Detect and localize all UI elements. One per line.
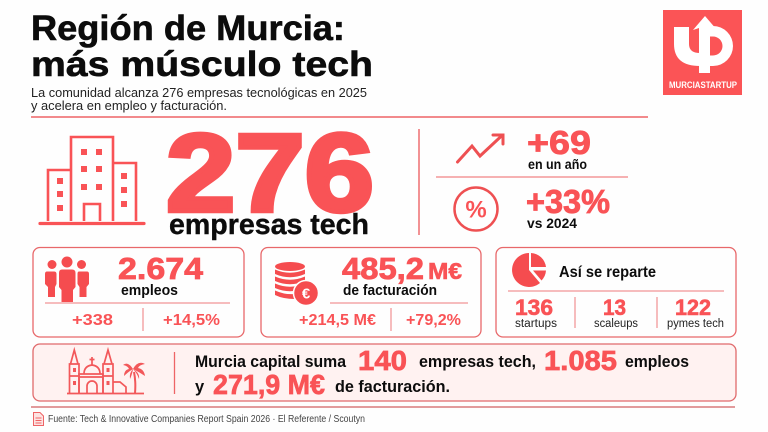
subtitle: y acelera en empleo y facturación. <box>31 98 227 113</box>
panel: así se reparte: 136 <box>515 295 553 320</box>
icon: pie chart <box>512 253 546 287</box>
panel: empleos: 2.674 <box>118 252 203 286</box>
text: capital stats line 2: y <box>195 378 205 396</box>
icon: cathedral and palm <box>67 350 145 394</box>
hero number: 276 empresas tech: 276 <box>166 112 374 235</box>
icon: coins with euro: € <box>302 286 311 302</box>
icon: percent circle: % <box>465 196 487 224</box>
logo: Murcia Startup <box>663 10 742 95</box>
text: capital stats line 2: de facturación. <box>335 378 450 396</box>
text: capital stats line 1 <box>195 345 689 376</box>
stat: +33% vs 2024: +33% <box>526 183 610 220</box>
icon: percent circle <box>454 188 498 230</box>
text: capital stats line 2: 271,9 M€ <box>213 369 325 400</box>
hero number: 276 empresas tech: empresas tech <box>169 209 369 241</box>
panel: empleos: empleos <box>121 283 178 299</box>
title <box>31 9 373 84</box>
panel: así se reparte <box>496 248 736 337</box>
stat: +33% vs 2024: vs 2024 <box>527 216 577 231</box>
panel: facturación: 485,2 <box>342 252 424 286</box>
panel: empleos: +338 <box>72 312 113 329</box>
text: capital stats line 1: Murcia capital suma <box>195 353 347 371</box>
icon: trend arrow <box>458 135 503 162</box>
panel: empleos <box>33 248 244 337</box>
text: capital stats line 1: empleos <box>625 353 689 371</box>
panel: así se reparte: startups <box>515 318 557 330</box>
panel: así se reparte: scaleups <box>594 318 638 330</box>
stat: +33% vs 2024 <box>454 183 610 231</box>
source: Fuente: Tech & Innovative Companies Report Spain 2026 · El Referente / Scoutyn <box>48 414 365 425</box>
panel: facturación: M€ <box>428 258 462 284</box>
icon: coins with euro <box>275 262 318 306</box>
panel: facturación: +79,2% <box>406 312 461 329</box>
subtitle: La comunidad alcanza 276 empresas tecnológicas en 2025 <box>31 85 367 100</box>
stat: +69 en un año: en un año <box>528 157 587 172</box>
title: más músculo tech <box>31 45 373 84</box>
stat: +69 en un año <box>458 124 591 172</box>
text: capital stats line 1: empresas tech, <box>419 353 536 371</box>
panel: así se reparte: Así se reparte <box>559 264 656 281</box>
title: Región de Murcia: <box>31 9 345 48</box>
panel: facturación: +214,5 M€ <box>299 312 376 329</box>
panel: empleos: +14,5% <box>163 312 220 329</box>
panel: facturación: de facturación <box>343 283 437 299</box>
stat: +69 en un año: +69 <box>527 124 591 161</box>
icon: document <box>34 412 44 426</box>
text: capital stats line 1: 1.085 <box>544 345 617 376</box>
icon: people <box>45 256 89 302</box>
panel: así se reparte: 122 <box>675 295 711 320</box>
subtitle <box>31 85 367 113</box>
panel: facturación <box>261 248 481 337</box>
panel: así se reparte: pymes tech <box>667 318 724 330</box>
panel: Murcia capital <box>33 344 736 401</box>
text: capital stats line 1: 140 <box>358 345 407 376</box>
panel: así se reparte: 13 <box>603 295 626 320</box>
logo: Murcia Startup: MURCIASTARTUP <box>669 80 737 90</box>
icon: buildings <box>40 137 144 224</box>
text: capital stats line 2 <box>195 369 450 400</box>
